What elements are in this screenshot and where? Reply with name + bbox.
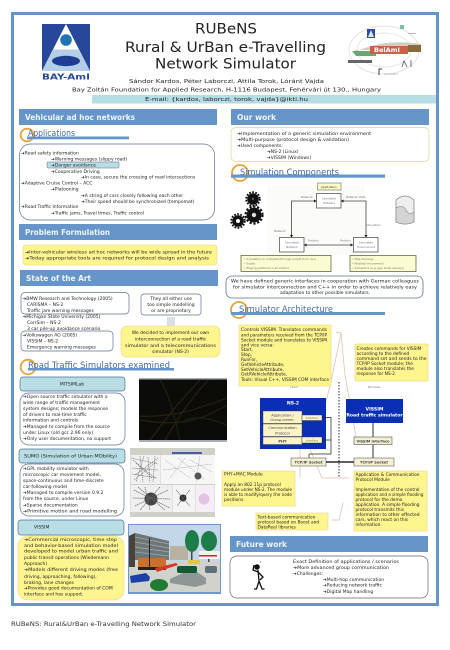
chart: architecture diagram: Road traffic simulator [346,412,403,418]
heading: State of the Art [20,270,218,286]
callout: application and communication protocol module: Implementation of the control [356,487,420,493]
callout: application and communication protocol module: application and a simple flooding [356,492,424,498]
panel: our work [231,128,429,162]
callout: traffic simulator notes: • Playing positions in all vectors [244,266,289,270]
panel: applications: ➔Traffic jams, Travel times, Traffic control [51,210,144,216]
callout: existing tools limitation: too simple modelling [147,302,195,308]
chart: architecture diagram: VISSIM [366,406,384,412]
authors and affiliation: Bay Zoltán Foundation for Applied Research, H-1116 Budapest, Fehérvári út 130., Hungary [72,86,381,94]
chart: architecture diagram: Application / [271,414,295,418]
panel: applications: ➔Cooperative Driving [51,169,100,175]
label: MITSIMLab [20,377,125,391]
callout: text-based communication: DataReel libraries [258,524,297,530]
chart: architecture diagram [260,382,403,477]
subheading: Simulation Components [231,165,385,181]
callout: VISSIM command creation: command set and sends to the [356,356,427,362]
panel: VISSIM notes: public transit operations (Wiedemann [24,555,109,561]
panel: applications: ➔Danger avoidance [51,163,96,169]
chart: simulation components diagram: Network [274,229,286,233]
callout: VISSIM COM control: Socket module and translates to VISSIM [241,338,327,344]
callout: decision: interconnection of a road traffic [135,336,207,342]
chart: architecture diagram: Interface [306,438,319,442]
callout: environment simulator notes: • Mobility (movement) [352,262,384,266]
callout: VISSIM command creation: Creates commands for VISSIM [356,346,422,352]
panel: future work: ➔More advanced group communication [293,565,389,571]
panel: related work list: 3 car pile-up avoidance scenario [27,326,101,332]
panel: related work list: CARISMA – NS-2 [27,302,63,308]
callout: existing tools limitation [141,294,201,315]
callout: decision [121,326,220,357]
callout: VISSIM command creation: TCP/IP Socket module; the [356,361,413,367]
callout: PHY+MAC module: positions. [224,497,245,503]
callout: text-based communication: Text-based communication [256,514,316,520]
label: VISSIM: VISSIM [34,524,49,530]
chart: architecture diagram: Group comm. [270,418,295,422]
callout: VISSIM COM control: SetVehicleAttribute, [241,367,284,373]
icon: exchange cycle [396,196,414,224]
chart: simulation components diagram: Network state [346,195,366,199]
panel: VISSIM notes: braking, lane changes [24,580,75,586]
panel: related work list: VISSIM – NS-2 [27,338,58,344]
panel: MITSIMLab notes: system designs; models the response [23,406,108,412]
panel: future work: Exact Definition of applications / scenarios [293,559,400,565]
callout: VISSIM command creation: module also translates the [356,366,414,372]
callout: text-based communication: protocol based on Boost and [258,520,319,526]
callout: decision: simulator (NS-2) [152,349,189,355]
callout: VISSIM COM control: Tools: Visual C++, VISSIM COM interface [240,377,329,383]
callout: VISSIM COM control: GetVehicleAttribute, [241,362,284,368]
panel: VISSIM notes: ➔Models different driving modes (free [24,567,118,573]
callout: application and communication protocol module [354,471,427,531]
panel: future work: ➔Digital Map handling [323,589,373,595]
callout: PHY+MAC module [222,471,295,506]
image: VISSIM 3D scene [128,524,221,594]
callout: decision: We decided to implement our own [132,330,209,336]
callout: application and communication protocol module: protocol for the demo [356,497,403,503]
chart: architecture diagram: NS-2 [287,400,299,406]
callout: VISSIM command creation [355,344,428,381]
chart: simulation components diagram: Position [308,238,319,242]
panel: VISSIM notes: interface and has support. [24,592,84,598]
panel: applications: ➔In case, secure the crossing of road intersections [81,174,196,180]
callout: existing tools limitation: They all either use [149,296,192,302]
callout: generic interfaces: adaptation to other possible simulators. [280,290,370,296]
callout: application and communication protocol module: application. A simple flooding [356,502,420,508]
callout: application and communication protocol module: Protocol Module [356,477,390,483]
callout: environment simulator notes: • Map topology [352,257,374,261]
chart: simulation components diagram: Simulated [285,240,299,244]
panel: applications: ➔A string of cars closely following each other [81,193,183,199]
callout: PHY+MAC module: PHY+MAC Module [224,472,263,478]
subheading: Simulator Architecture: Simulator Architecture [239,305,333,315]
chart: architecture diagram: TCP/IP Socket [360,461,388,465]
chart: simulation components diagram: Application [321,185,337,189]
panel: related work list: ➔BMW Research and Technology (2005) [22,296,113,302]
panel: future work: ➔Reducing network traffic [323,582,382,588]
chart: simulation components diagram: Software [323,201,335,205]
panel: MITSIMLab notes: under Linux (old gcc 2.96 only) [23,430,93,436]
panel: related work list: Traffic jam warning messages [26,308,94,314]
panel: related work list: Emergency warning messages [27,344,96,350]
label: VISSIM [18,520,124,535]
panel: SUMO notes [20,464,124,516]
panel: our work: ➔Used components: [237,143,283,149]
callout: VISSIM COM control: and parameters received from the TCP/IP [241,332,327,338]
panel: our work: ➔Multi-purpose (protocol design & validation) [237,137,349,143]
chart: simulation components diagram: Simulated [322,196,336,200]
chart: architecture diagram: VISSIM interface [356,440,390,444]
callout: environment simulator notes: • Semantics (e.g. gas, temp sensors) [352,266,404,270]
panel: SUMO notes: ➔GPL mobility simulator with [23,466,89,472]
panel: SUMO notes: microscopic car movement model, [23,472,101,478]
panel: MITSIMLab notes: of drivers to real-time traffic [23,412,87,418]
panel: our work: ➔VISSIM (Windows) [267,155,311,161]
panel: applications: ➔Road safety information [21,150,79,156]
arrow: limitation to decision [167,317,175,326]
panel: MITSIMLab notes [20,393,125,445]
callout: VISSIM command creation: according to the defined [356,351,409,357]
heading: State of the Art: State of the Art [26,274,91,283]
panel: VISSIM notes: ➔Provides good documentation of COM [24,586,113,592]
callout: environment simulator notes [350,256,416,272]
title [125,22,326,72]
subheading: Simulator Architecture [231,302,385,318]
panel: SUMO notes: from the source, under Linux [23,496,89,502]
panel: MITSIMLab notes: ➔Open source traffic simulator with a [23,394,108,400]
email band [92,95,436,104]
subheading: Applications: Applications [28,129,75,139]
panel: future work: ➔Challenges: [293,571,323,577]
chart: simulation components diagram [267,183,381,255]
chart: architecture diagram: Linux [290,385,298,389]
chart: architecture diagram: Windows [368,385,381,389]
callout: application and communication protocol module: information to other effected [356,512,420,518]
callout: problem statement: ➔Today appropriate tools are required for protocol design and analysis [25,256,210,262]
callout: traffic simulator notes: • Simulation is controlled through scripts from ns-2 [244,257,316,261]
callout: traffic simulator notes: • Scalar [244,262,256,266]
callout: application and communication protocol module: Application & Communication [356,472,420,478]
callout: PHY+MAC module: Apply an 802.11p protocol [224,482,281,488]
callout: traffic simulator notes [241,256,331,272]
callout: VISSIM COM control: RunFor, [241,357,257,363]
callout: application and communication protocol module: protocol transmits this [356,507,405,513]
chart: architecture diagram: Interface [306,416,319,420]
callout: VISSIM COM control: Controls VISSIM. Translates commands [241,327,328,333]
panel: applications: ➔Their speed should be synchronized (tempomat) [81,199,194,205]
panel: future work [230,556,428,598]
callout: VISSIM command creation: response for NS-2. [356,371,396,377]
callout: generic interfaces: We have defined generic interfaces in cooperation with German colleagues [231,278,420,284]
title: RUBeNS [195,22,257,38]
email band: E-mail: {kardos, laborczi, torok, vajda}@ikti.hu [145,97,308,103]
panel: VISSIM notes: and behavior-based simulation model [24,543,118,549]
callout: problem statement [23,245,217,265]
label: SUMO: SUMO (Simulation of Urban MObility) [24,454,117,460]
panel: MITSIMLab notes: wide range of traffic management [23,400,100,406]
panel: applications: ➔Road Traffic Information [21,204,79,210]
image: SUMO screenshot [130,448,215,517]
panel: related work list: ➔Volkswagen AG (2005) [22,332,77,338]
heading: Problem Formulation: Problem Formulation [25,228,110,237]
callout: generic interfaces [226,276,423,298]
panel: related work list: CorrSim – NS-2 [27,320,61,326]
chart: architecture diagram: TCP/IP Socket [295,461,323,465]
panel: VISSIM notes: driving, approaching, following), [24,574,97,580]
panel: SUMO notes: ➔Primitive motion and road modelling [23,508,117,514]
callout: VISSIM COM control: and vice versa: [241,342,274,348]
footer caption: RUBeNS: Rural&UrBan e-Travelling Network Simulator [11,620,196,628]
chart: simulation components diagram: Environment [357,245,376,249]
callout: VISSIM COM control [239,325,331,386]
callout: PHY+MAC module: module under NS-2. The module [224,487,292,493]
panel: VISSIM notes: Approach) [24,561,47,567]
heading: Vehicular ad hoc networks [19,109,217,125]
panel: future work: ➔Multi-hop communication [323,577,384,583]
panel: SUMO notes: space-continuous and time-discrete [23,478,104,484]
label: MITSIMLab: MITSIMLab [60,382,84,388]
image: MITSIMLab screenshot [139,378,227,442]
panel: VISSIM notes: developed to model urban traffic and [24,548,118,554]
callout: PHY+MAC module: is able to modify/query the node [224,492,292,498]
chart: simulation components diagram: Network [286,245,298,249]
chart: simulation components diagram: Simulation [366,223,381,227]
chart: architecture diagram: Protocol [275,432,290,436]
panel: related work list [21,292,129,351]
icon: thinking stick figure [253,561,264,589]
panel: SUMO notes: ➔Managed to compile version 0.9.2 [23,490,104,496]
panel: MITSIMLab notes: information and controls [23,418,79,424]
panel: related work list: ➔Michigan State University (2005) [22,314,101,320]
panel: applications: ➔Platooning [51,187,79,193]
logo: BAY-AmI: BAY-AmI [42,72,90,82]
chart: simulation components diagram: Simulated [359,240,373,244]
title: Rural & UrBan e-Travelling [125,40,326,56]
logo: BAY-AmI [42,24,90,82]
panel: applications: ➔Warning messages (slippy road) [51,156,127,162]
heading: Our work: Our work [237,113,277,122]
heading: Future work [230,536,428,552]
callout: VISSIM COM control: Stop, [241,352,252,358]
panel: our work: ➔Implementation of a generic simulation environment [237,131,371,137]
label: SUMO [19,449,125,463]
logo: BelAmI: Information [384,72,399,76]
subheading: Applications [21,129,129,141]
panel: VISSIM notes [18,536,124,600]
panel: SUMO notes: car-following model [23,484,67,490]
panel: SUMO notes: ➔Sparse documentation [23,502,78,508]
callout: problem statement: ➔Inter-vehicular wireless ad hoc networks will be wide spread in the future [25,250,212,256]
callout: VISSIM COM control: GetAVehicleAttribute, [241,372,287,378]
callout: VISSIM COM control: Start, [241,347,253,353]
leader lines [300,332,356,520]
heading: Our work [231,109,429,125]
callout: text-based communication [256,513,328,530]
panel: applications [20,144,214,220]
callout: existing tools limitation: or are proprietary [151,308,191,314]
authors and affiliation: Sándor Kardos, Péter Laborczi, Attila Torok, Lóránt Vajda [129,78,324,85]
chart: architecture diagram: Communication [268,426,297,430]
subheading: Simulation Components: Simulation Components [240,168,339,178]
heading: Future work: Future work [236,540,288,549]
panel: MITSIMLab notes: ➔Managed to compile from the source [23,424,110,430]
logo: BelAmI: BelAmI [374,46,400,54]
heading: Problem Formulation [19,224,217,240]
subheading: Road Traffic Simulators examined: Road Traffic Simulators examined [28,361,170,371]
chart: architecture diagram: PHY [278,440,287,444]
panel: our work: ➔NS-2 (Linux) [267,149,299,155]
callout: application and communication protocol module: cars, which react on this [356,517,409,523]
icon: gears [231,192,262,228]
authors and affiliation [72,78,381,94]
callout: generic interfaces: for simulator interconnection and C++ in order to achieve relatively easy [233,284,417,290]
panel: applications: ➔Adaptive Cruise Control – ACC [21,180,92,186]
callout: application and communication protocol module: information. [356,522,382,528]
subheading: Road Traffic Simulators examined [21,360,174,374]
heading: Vehicular ad hoc networks: Vehicular ad hoc networks [25,113,135,122]
chart: simulation components diagram: Network [301,195,313,199]
title: Network Simulator [155,56,296,72]
callout: decision: simulator and a telecommunications [125,343,217,349]
chart: simulation components diagram: Position [340,238,351,242]
logo: BelAmI [348,25,421,76]
panel: VISSIM notes: ➔Commercial microscopic, time step [24,537,117,543]
panel: MITSIMLab notes: ➔Only user documentation, no support [23,436,111,442]
